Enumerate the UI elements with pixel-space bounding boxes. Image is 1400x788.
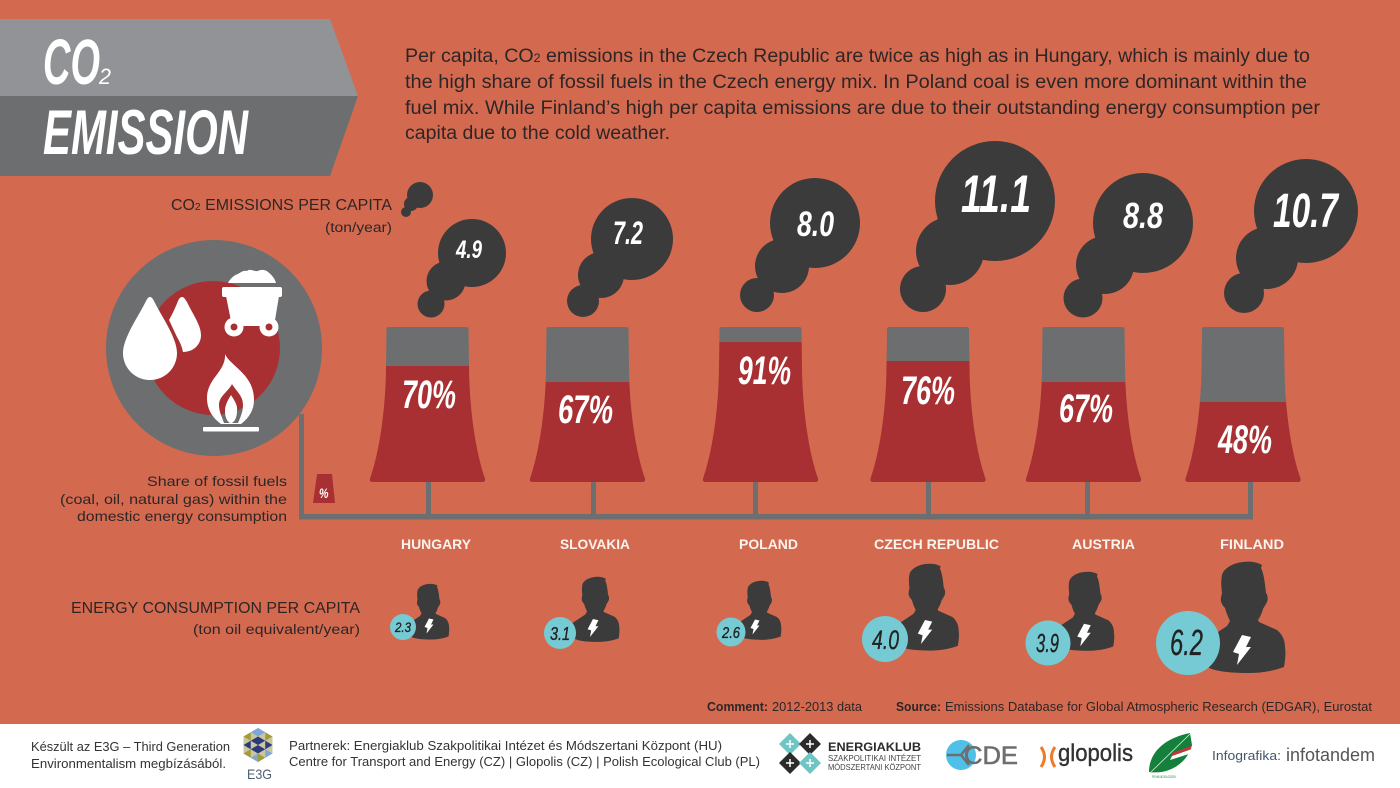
logo: Glopolis: glopolis — [1058, 740, 1133, 767]
intro text block: fuel mix. While Finland’s high per capita emissions are due to their outstanding energy consumption per — [405, 98, 1321, 119]
Czech Republic: smoke: 11.1 — [961, 165, 1031, 224]
icon: coal cart — [222, 270, 282, 336]
Austria: smoke: 8.8 — [1123, 195, 1163, 236]
title banner: EMISSION — [43, 98, 249, 168]
comment and source note — [707, 700, 1373, 714]
Austria: energy person 3.9 — [1026, 572, 1114, 666]
logo: Energiaklub: ENERGIAKLUB — [828, 740, 921, 754]
country labels: CZECH REPUBLIC — [874, 536, 999, 552]
footer partners text — [289, 738, 760, 769]
footer commissioning text: Készült az E3G – Third Generation — [31, 739, 230, 754]
Finland: smoke: 10.7 — [1273, 185, 1340, 238]
Slovakia: smoke: 7.2 — [613, 215, 643, 251]
footer bar — [0, 724, 1400, 788]
Poland: smoke — [740, 178, 860, 312]
Slovakia: smoke — [567, 198, 673, 317]
Slovakia: energy person 3.1: 3.1 — [550, 624, 570, 644]
logo: CDE — [946, 740, 1018, 770]
Austria: energy person 3.9: 3.9 — [1036, 628, 1059, 658]
title banner — [0, 19, 358, 176]
legend mini tower: % — [319, 485, 329, 501]
legend: energy consumption per capita — [71, 600, 361, 637]
fossil share legend text — [60, 473, 287, 524]
footer commissioning text: Environmentalism megbízásából. — [31, 756, 226, 771]
legend: CO2 emissions per capita: CO2 EMISSIONS PER CAPITA — [171, 197, 393, 214]
footer partners text: Partnerek: Energiaklub Szakpolitikai Intézet és Módszertani Központ (HU) — [289, 738, 722, 753]
legend: energy consumption per capita: (ton oil equivalent/year) — [193, 622, 360, 637]
intro text block — [405, 46, 1321, 144]
Hungary: smoke — [418, 219, 506, 318]
comment and source note: Emissions Database for Global Atmospheric Research (EDGAR), Eurostat — [945, 700, 1373, 714]
title banner: CO — [43, 26, 100, 98]
country labels: AUSTRIA — [1072, 536, 1135, 552]
country labels — [401, 536, 1284, 552]
Poland: tower 91%: 91% — [738, 349, 791, 393]
icon: oil drops — [123, 297, 201, 380]
logo: Polish Ecological Club leaf: PSI NIKLUB EKOLOGICZNY — [1152, 774, 1176, 779]
legend: CO2 emissions per capita — [171, 182, 433, 235]
Finland: smoke — [1224, 159, 1358, 313]
legend: CO2 emissions per capita: (ton/year) — [325, 220, 392, 235]
Slovakia: tower 67%: 67% — [558, 388, 613, 432]
legend mini tower — [313, 474, 335, 503]
comment and source note: Source: — [896, 700, 941, 714]
Czech Republic: tower 76% — [868, 327, 988, 482]
Austria: tower 67%: 67% — [1059, 387, 1113, 431]
logo: CDE: CDE — [964, 742, 1018, 770]
footer partners text: Centre for Transport and Energy (CZ) | Glopolis (CZ) | Polish Ecological Club (PL) — [289, 754, 760, 769]
fossil share legend text: (coal, oil, natural gas) within the — [60, 491, 287, 507]
Hungary: energy person 2.3: 2.3 — [394, 619, 411, 635]
Poland: energy person 2.6: 2.6 — [721, 625, 740, 642]
Czech Republic: energy person 4.0: 4.0 — [872, 625, 899, 655]
intro text block: capita due to the cold weather. — [405, 123, 670, 144]
fossil share legend text: Share of fossil fuels — [147, 473, 287, 489]
comment and source note: Comment: — [707, 700, 768, 714]
Czech Republic: energy person 4.0 — [862, 564, 959, 662]
logo: Energiaklub: SZAKPOLITIKAI INTÉZET — [828, 754, 921, 763]
logo: Polish Ecological Club leaf — [1149, 733, 1192, 779]
Slovakia: tower 67% — [528, 327, 648, 482]
Austria: tower 67% — [1024, 327, 1144, 482]
connector pipe — [299, 414, 1253, 520]
intro text block: the high share of fossil fuels in the Czech energy mix. In Poland coal is even more dominant within the — [405, 72, 1307, 93]
country labels: SLOVAKIA — [560, 536, 630, 552]
Czech Republic: tower 76%: 76% — [901, 369, 955, 413]
footer infographic credit: infotandem — [1286, 745, 1375, 765]
Finland: tower 48%: 48% — [1217, 418, 1272, 462]
Poland: smoke: 8.0 — [797, 205, 834, 244]
Finland: energy person 6.2: 6.2 — [1170, 622, 1203, 663]
title banner: 2 — [98, 64, 111, 89]
Hungary: smoke: 4.9 — [455, 236, 482, 264]
comment and source note: 2012-2013 data — [772, 700, 862, 714]
Finland: energy person 6.2 — [1156, 562, 1285, 675]
logo: E3G — [244, 728, 272, 782]
Slovakia: energy person 3.1 — [544, 577, 619, 649]
Hungary: tower 70% — [368, 327, 488, 482]
fossil share legend text: domestic energy consumption — [77, 508, 287, 524]
Finland: tower 48% — [1183, 327, 1303, 482]
logo: Energiaklub: MÓDSZERTANI KÖZPONT — [828, 763, 921, 772]
Czech Republic: smoke — [900, 141, 1055, 312]
logo: Energiaklub — [779, 733, 921, 774]
country labels: HUNGARY — [401, 536, 472, 552]
footer infographic credit — [1212, 745, 1375, 765]
Poland: tower 91% — [700, 327, 820, 482]
Hungary: tower 70%: 70% — [402, 373, 456, 417]
Poland: energy person 2.6 — [716, 581, 781, 646]
Hungary: energy person 2.3 — [390, 584, 449, 640]
intro text block: Per capita, CO 2 emissions in the Czech Republic are twice as high as in Hungary, which is mainly due to — [405, 46, 1310, 67]
fuels icon circle — [106, 240, 322, 456]
logo: E3G: E3G — [247, 766, 272, 782]
country labels: FINLAND — [1220, 536, 1284, 552]
country labels: POLAND — [739, 536, 798, 552]
legend: energy consumption per capita: ENERGY CONSUMPTION PER CAPITA — [71, 600, 361, 617]
footer infographic credit: Infografika: — [1212, 748, 1281, 763]
footer commissioning text — [31, 739, 230, 771]
icon: gas flame — [203, 354, 259, 432]
Austria: smoke — [1064, 173, 1193, 318]
